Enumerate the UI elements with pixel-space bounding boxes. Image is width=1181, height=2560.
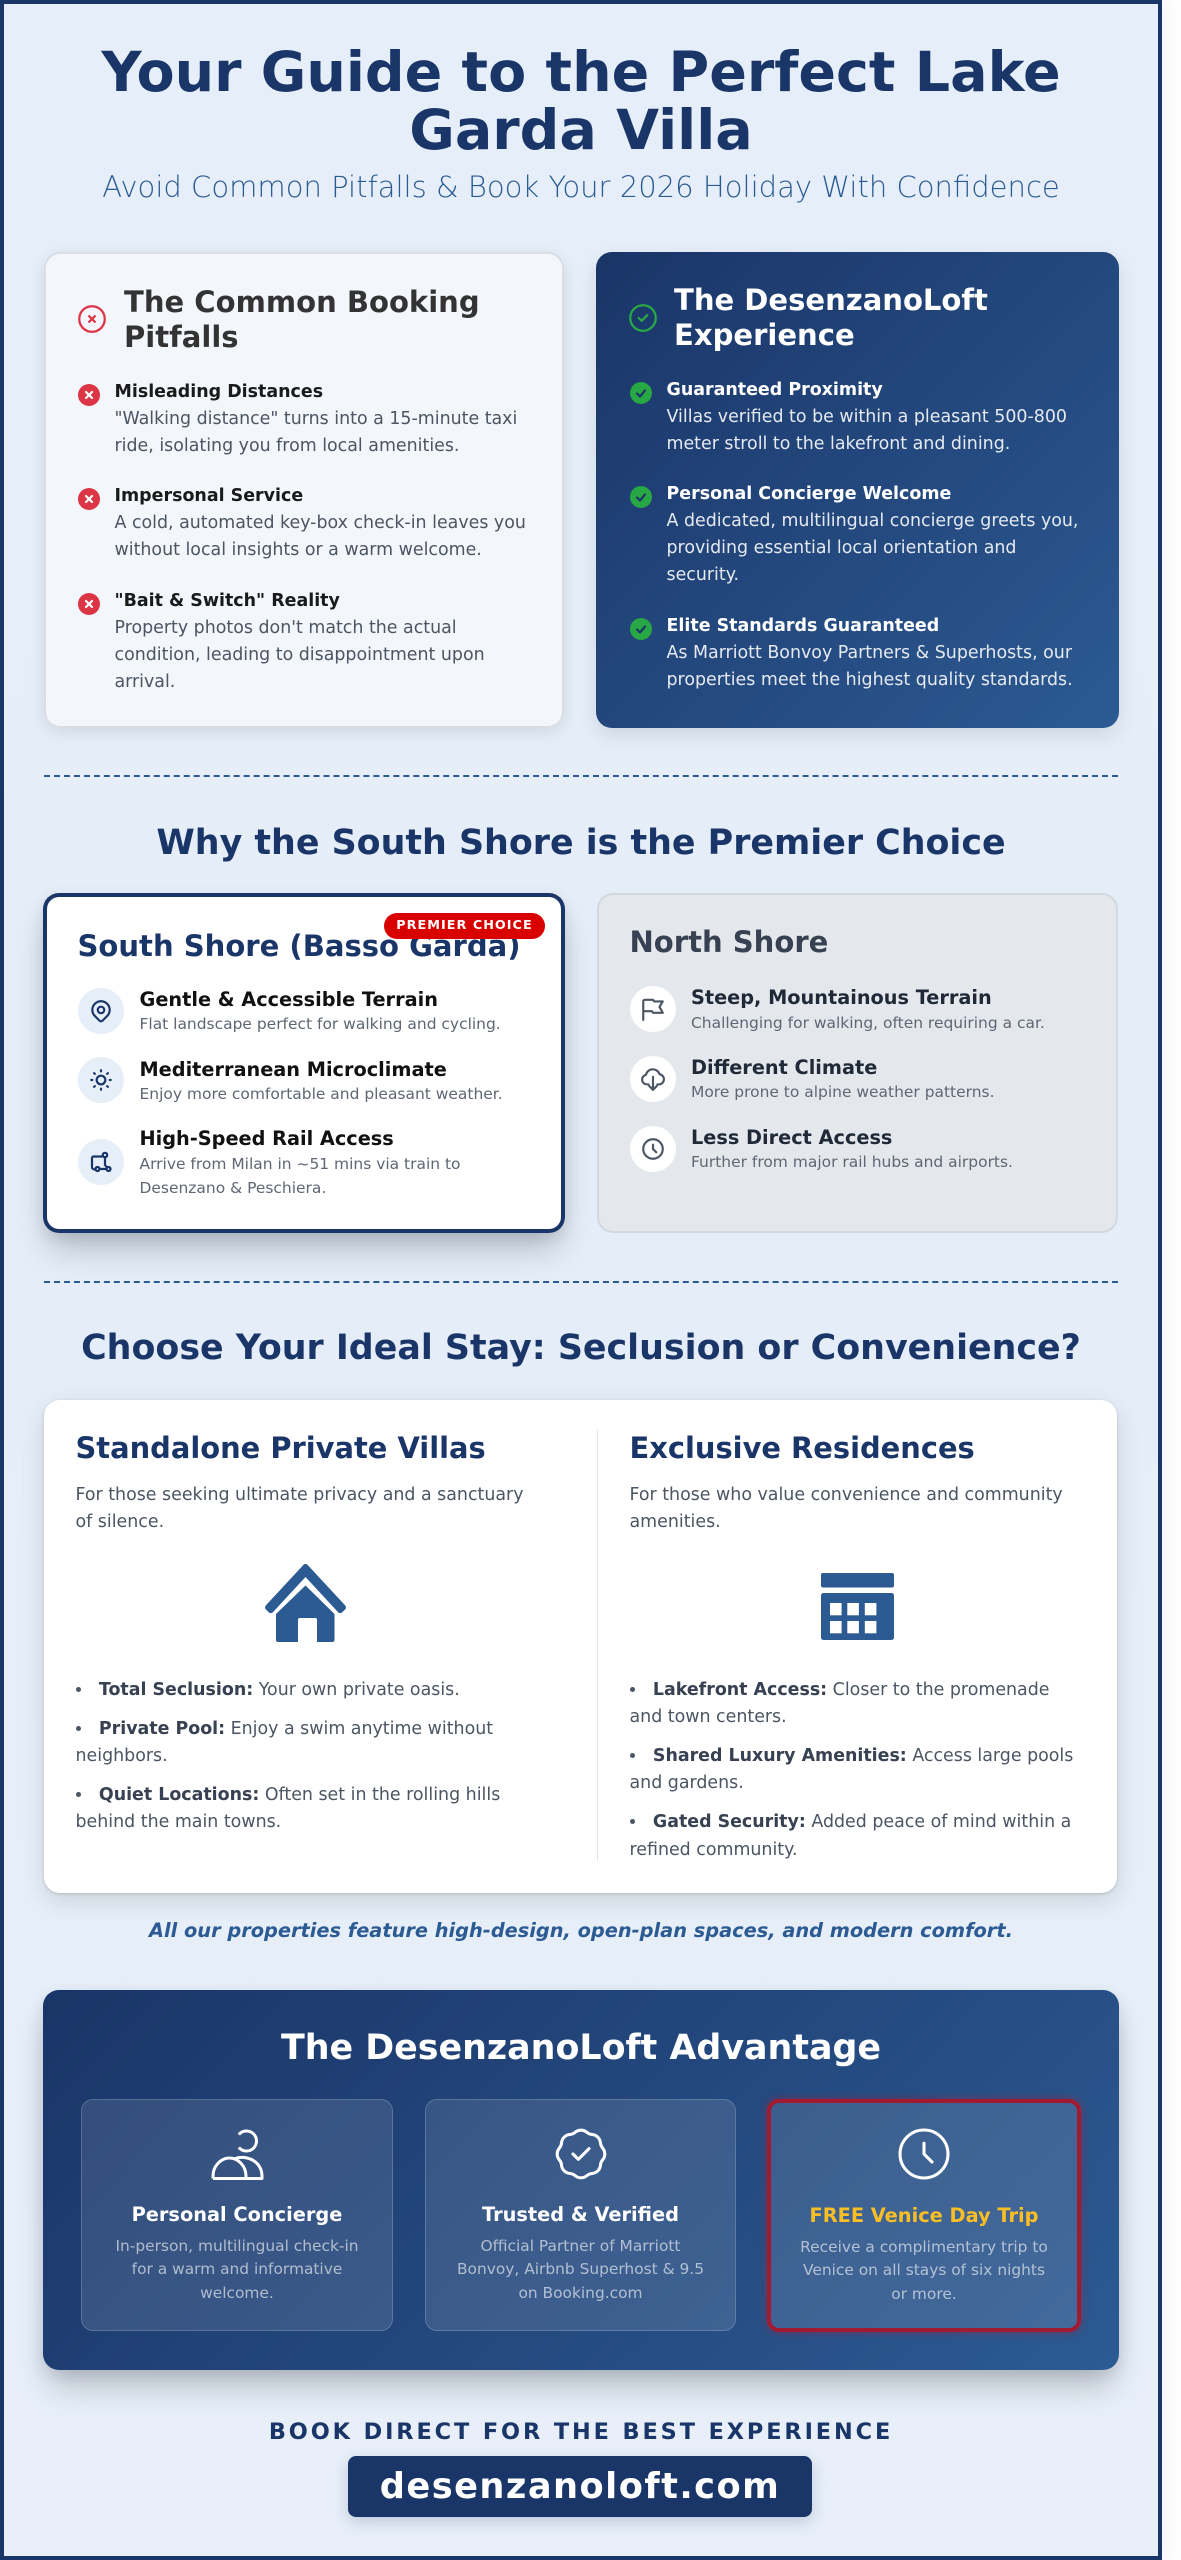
item text: condition, leading to disappointment upon [114,645,485,665]
heading: south shore section: Why the South Shore is the Premier Choice [156,822,1006,862]
card title: Trusted & Verified [482,2203,679,2226]
villas bullet list: neighbors. [76,1746,168,1766]
panel: stay options [44,1400,1117,1893]
item text: Villas verified to be within a pleasant 500-800 [666,407,1067,427]
icon: green check [630,486,652,508]
item title: Different Climate [691,1056,877,1078]
item text: Flat landscape perfect for walking and cycling. [140,1015,501,1033]
icon: rail [78,1139,124,1185]
residences description [630,1485,1063,1532]
residences bullet list: Gated Security: Added peace of mind within a [653,1812,1071,1832]
icon: location pin [78,988,124,1034]
residences heading: Exclusive Residences [630,1431,975,1465]
item title: Guaranteed Proximity [666,380,883,400]
heading: experience: Experience [674,318,855,352]
item text: providing essential local orientation and [666,538,1016,558]
item: climate [630,1056,995,1102]
icon: x circle [78,305,106,333]
icon: green check [630,618,652,640]
icon: check circle [629,304,657,332]
heading: experience: The DesenzanoLoft [674,282,988,316]
card text: or more. [891,2285,957,2303]
item title: Mediterranean Microclimate [140,1058,447,1080]
card title: Personal Concierge [132,2203,342,2226]
item text: ride, isolating you from local amenities. [114,436,459,456]
item text: properties meet the highest quality standards. [666,670,1073,690]
item text: "Walking distance" turns into a 15-minute taxi [114,409,517,429]
residences description: amenities. [630,1512,721,1532]
item: bait and switch [78,591,485,692]
north shore heading: North Shore [630,925,828,959]
card text: In-person, multilingual check-in [115,2237,359,2255]
item title: Impersonal Service [114,486,303,506]
icon: sun [78,1057,124,1103]
item text: As Marriott Bonvoy Partners & Superhosts, our [666,643,1072,663]
advantage heading: The DesenzanoLoft Advantage [281,2028,881,2068]
villas description: For those seeking ultimate privacy and a sanctuary [76,1485,524,1505]
item text [114,409,517,456]
panel: south shore [43,893,565,1233]
item: guaranteed proximity [630,380,1067,454]
residences bullet list: Lakefront Access: Closer to the promenade [653,1680,1049,1700]
panel: advantage [43,1990,1119,2370]
item title: "Bait & Switch" Reality [114,591,340,611]
item text [666,643,1073,690]
item: elite standards [630,616,1073,690]
heading: pitfalls: The Common Booking [124,284,480,318]
item text: A dedicated, multilingual concierge greets you, [666,511,1078,531]
item title: Elite Standards Guaranteed [666,616,939,636]
villas description [76,1485,524,1532]
item text: More prone to alpine weather patterns. [691,1083,995,1101]
item text: Property photos don't match the actual [114,618,457,638]
badge: premier choice [384,912,545,938]
residences bullet list [630,1680,1073,1860]
villas bullet list: Private Pool: Enjoy a swim anytime without [99,1719,493,1739]
card title: FREE Venice Day Trip [810,2204,1038,2227]
title: Garda Villa [409,98,753,163]
card: personal concierge [81,2099,393,2331]
item: terrain [78,988,501,1034]
villas bullet list [76,1680,500,1832]
panel: common booking pitfalls [44,252,564,728]
panel: north shore [597,893,1118,1233]
item title: Misleading Distances [114,382,323,402]
column: private villas [76,1431,524,1832]
icon: house [265,1564,346,1642]
card text [425,2235,736,2305]
icon: verified badge [548,2122,612,2186]
item: access [630,1126,1013,1172]
villas bullet list: Quiet Locations: Often set in the rolling hills [99,1785,500,1805]
icon: building [821,1573,894,1640]
card text [115,2237,359,2302]
note: design statement: All our properties feature high-design, open-plan spaces, and modern comfort. [149,1919,1013,1942]
item title: Personal Concierge Welcome [666,484,951,504]
item text: Enjoy more comfortable and pleasant weather. [140,1085,503,1103]
heading: pitfalls [124,284,480,354]
item title: High-Speed Rail Access [140,1127,394,1150]
item: personal concierge welcome [630,484,1078,585]
title: Your Guide to the Perfect Lake [101,40,1061,104]
card text: Receive a complimentary trip to [800,2238,1048,2256]
icon: red x [78,488,100,510]
icon: clock [630,1126,676,1172]
item title: Steep, Mountainous Terrain [691,986,992,1009]
item text: Further from major rail hubs and airports. [691,1153,1013,1171]
item text: meter stroll to the lakefront and dining. [666,434,1010,454]
heading: pitfalls: Pitfalls [124,320,239,354]
card text: Bonvoy, Airbnb Superhost & 9.5 [457,2260,704,2278]
item text: arrival. [114,672,175,692]
villas heading: Standalone Private Villas [76,1431,486,1465]
card: trusted and verified [425,2099,736,2331]
icon: red x [78,384,100,406]
item: rail [78,1127,460,1196]
icon: flag [630,986,676,1032]
item text: A cold, automated key-box check-in leaves you [114,513,526,533]
icon: clock [892,2122,956,2186]
residences bullet list: Shared Luxury Amenities: Access large pools [653,1746,1073,1766]
card: free venice day trip [767,2099,1081,2332]
card text: on Booking.com [518,2284,643,2302]
item title: Gentle & Accessible Terrain [140,988,438,1010]
villas bullet list: Total Seclusion: Your own private oasis. [99,1680,460,1700]
title [100,40,1061,163]
card text: Venice on all stays of six nights [803,2261,1045,2279]
residences bullet list: and town centers. [630,1707,787,1727]
column: exclusive residences [630,1431,1073,1860]
item text: Challenging for walking, often requiring a car. [691,1014,1045,1032]
item text [666,511,1078,585]
item title: Less Direct Access [691,1126,892,1148]
residences bullet list: and gardens. [630,1773,744,1793]
villas bullet list: behind the main towns. [76,1812,281,1832]
heading: ideal stay section: Choose Your Ideal Stay: Seclusion or Convenience? [81,1328,1081,1368]
card text: for a warm and informative [132,2260,342,2278]
item text: Arrive from Milan in ~51 mins via train to [140,1154,460,1172]
residences description: For those who value convenience and community [630,1485,1063,1505]
villas description: of silence. [76,1512,164,1532]
subtitle: Avoid Common Pitfalls & Book Your 2026 Holiday With Confidence [102,170,1060,204]
button: website: desenzanoloft.com [380,2466,780,2507]
residences bullet list: refined community. [630,1840,797,1860]
south shore heading: South Shore (Basso Garda) [78,928,521,962]
card text: Official Partner of Marriott [481,2237,680,2255]
button: website [348,2456,812,2517]
badge: premier choice: PREMIER CHOICE [396,918,533,932]
card text: welcome. [200,2284,274,2302]
item text [114,618,485,692]
item text: Desenzano & Peschiera. [140,1178,326,1196]
icon: red x [78,593,100,615]
item text [114,513,526,560]
icon: cloud download [630,1056,676,1102]
icon: green check [630,382,652,404]
item: climate [78,1057,503,1103]
card text [767,2236,1081,2306]
heading: experience [674,282,988,352]
item text: security. [666,565,739,585]
panel: desenzanoloft experience [596,252,1119,728]
item text: without local insights or a warm welcome. [114,540,482,560]
icon: concierge [212,2130,264,2180]
item text [666,407,1067,454]
item: terrain [630,986,1045,1032]
call to action label: BOOK DIRECT FOR THE BEST EXPERIENCE [269,2418,893,2444]
item: impersonal service [78,486,526,560]
item text [140,1154,460,1196]
item: misleading distances [78,382,517,456]
